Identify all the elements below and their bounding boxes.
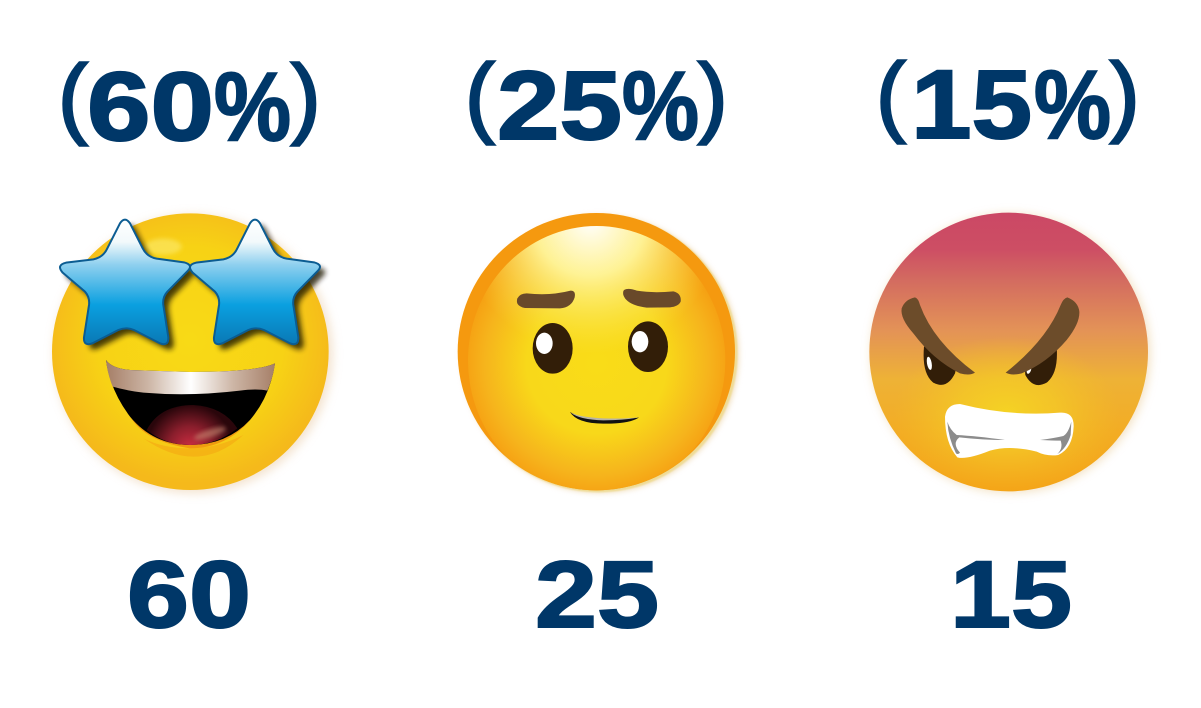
heading: 15%	[876, 44, 1140, 159]
heading: 15%: 15	[911, 50, 1032, 159]
eyebrows	[517, 289, 681, 308]
icon: angry face	[869, 213, 1150, 493]
heading: 15%: (	[876, 44, 906, 144]
count: 15: 15	[950, 542, 1072, 648]
heading: 15%: )	[1110, 44, 1140, 144]
heading: 60%: 60	[87, 52, 214, 161]
heading: 25%: 25	[497, 51, 622, 160]
eyes	[533, 321, 668, 374]
heading: 60%: (	[58, 46, 88, 146]
heading: 60%: )	[291, 46, 321, 146]
heading: 25%: )	[698, 45, 728, 145]
icon: star-eyes laughing face	[52, 213, 333, 493]
heading: 60%: %	[214, 52, 291, 161]
count: 60: 60	[127, 542, 251, 648]
count: 25: 25	[535, 542, 659, 648]
heading: 25%: %	[622, 51, 699, 160]
eyebrows	[901, 297, 1079, 375]
heading: 25%: (	[465, 45, 495, 145]
heading: 15%: %	[1034, 50, 1111, 159]
eyes	[924, 347, 1057, 385]
heading: 25%	[465, 45, 728, 160]
icon: slightly smiling face	[458, 213, 739, 495]
mouth	[106, 360, 275, 457]
teeth	[945, 404, 1074, 458]
mouth	[570, 412, 639, 424]
infographic: three emoji ratings	[50, 59, 1156, 629]
star eyes	[60, 220, 320, 344]
heading: 60%	[58, 46, 321, 161]
